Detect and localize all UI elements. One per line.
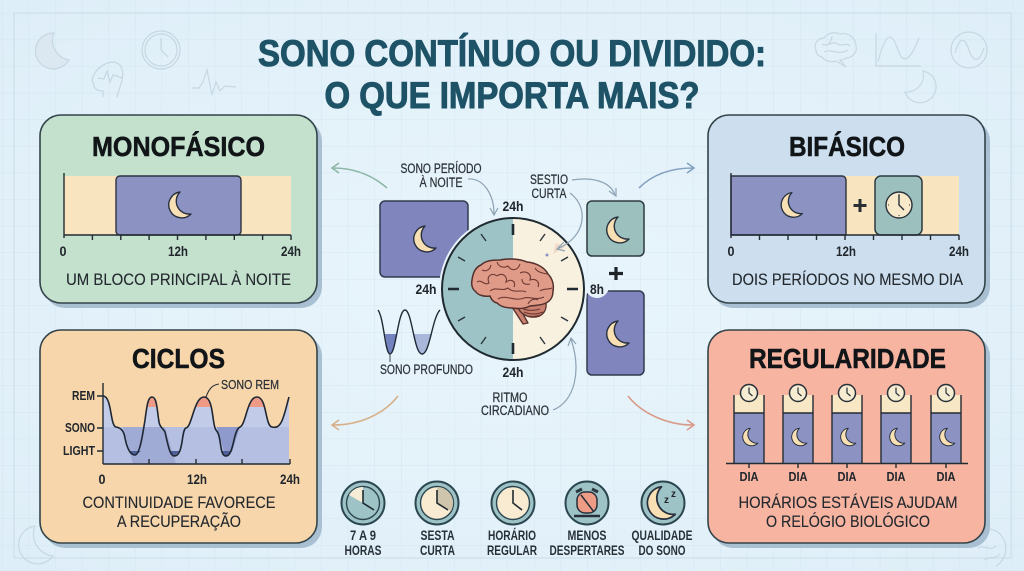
stat: horário regular — [487, 482, 537, 558]
weekly day columns: DIA — [936, 470, 956, 484]
arrow: to monofásico — [332, 163, 387, 188]
decorative icon: sine clock — [951, 32, 987, 68]
stat: 7 a 9 horas: 7 A 9 — [350, 528, 376, 543]
decorative icon: head with brain waves — [92, 62, 123, 97]
panel: monofásico — [40, 115, 322, 308]
sleep cycle chart: REM — [72, 389, 95, 403]
stat: 7 a 9 horas — [342, 482, 384, 558]
timeline chart: bifásico: 0 — [728, 243, 735, 259]
icon: moon — [607, 321, 629, 347]
sleep cycle chart: SONO — [65, 421, 95, 435]
callout: ritmo circadiano: CIRCADIANO — [481, 403, 549, 418]
deep sleep chart — [378, 310, 473, 377]
timeline chart: monofásico: 12h — [168, 243, 188, 259]
decorative icon: brain bottom right — [968, 529, 1006, 566]
timeline chart: monofásico: 0 — [60, 243, 67, 259]
stat: menos despertares: DESPERTARES — [550, 543, 624, 558]
callout: sono rem: SONO REM — [221, 378, 279, 392]
sleep cycle chart: 0 — [98, 471, 106, 487]
sleep block: nap — [587, 201, 644, 256]
stat: sesta curta — [416, 482, 458, 558]
stat: horário regular: REGULAR — [487, 543, 537, 558]
callout: sestio curta: CURTA — [532, 186, 566, 201]
callout: ritmo circadiano — [481, 338, 576, 418]
icon: plus — [854, 199, 866, 212]
icon: moon — [781, 193, 802, 217]
stat: qualidade do sono — [632, 482, 692, 558]
caption: regularidade: HORÁRIOS ESTÁVEIS AJUDAM — [738, 493, 958, 512]
title: O QUE IMPORTA MAIS? — [324, 75, 700, 116]
callout: sono período à noite — [400, 161, 498, 215]
caption: monofásico: UM BLOCO PRINCIPAL À NOITE — [66, 270, 291, 289]
weekly day columns: DIA — [838, 470, 856, 484]
heading: ciclos: CICLOS — [132, 343, 225, 374]
stat: menos despertares — [550, 482, 624, 558]
clock labels: 8h — [590, 281, 604, 297]
circadian clock — [416, 198, 604, 380]
caption: bifásico: DOIS PERÍODOS NO MESMO DIA — [732, 270, 964, 289]
caption: regularidade — [738, 493, 958, 531]
sleep cycle chart: 12h — [187, 471, 207, 487]
arrow: to regularidade — [628, 396, 694, 430]
stat: horário regular: HORÁRIO — [488, 528, 536, 543]
callout: sono período à noite: À NOITE — [420, 175, 462, 190]
caption: ciclos: A RECUPERAÇÃO — [117, 512, 241, 531]
callout: sestio curta: SESTIO — [530, 172, 568, 187]
callout: sestio curta — [530, 172, 616, 251]
decorative icon: line chart — [876, 33, 921, 66]
timeline chart: bifásico — [728, 173, 969, 259]
stat: qualidade do sono: DO SONO — [638, 543, 686, 558]
callout: sono rem — [206, 378, 279, 397]
weekly day columns: DIA — [788, 470, 808, 484]
timeline chart: monofásico — [60, 173, 301, 259]
stat: qualidade do sono: z — [664, 495, 669, 506]
arrow: to ciclos — [332, 396, 398, 430]
panel: bifásico — [708, 115, 990, 308]
stat: sesta curta: SESTA — [420, 528, 455, 543]
panel: regularidade — [708, 330, 990, 548]
caption: ciclos: CONTINUIDADE FAVORECE — [82, 493, 276, 512]
stat: sesta curta: CURTA — [420, 543, 455, 558]
caption: regularidade: O RELÓGIO BIOLÓGICO — [766, 512, 930, 531]
title: SONO CONTÍNUO OU DIVIDIDO: — [258, 33, 766, 74]
panel: ciclos — [40, 330, 322, 548]
icon: moon — [607, 217, 629, 243]
icon: brain — [472, 259, 553, 324]
decorative icon: moon bottom left — [19, 526, 53, 564]
stat: qualidade do sono: QUALIDADE — [632, 528, 692, 543]
heading: regularidade: REGULARIDADE — [749, 343, 946, 374]
title — [258, 33, 766, 116]
decorative icon: moon top left — [35, 33, 69, 69]
decorative icon: clock — [142, 31, 180, 69]
icon: plus between blocks — [609, 267, 623, 280]
callout: ritmo circadiano: RITMO — [492, 390, 528, 405]
icon: moon — [414, 226, 436, 252]
callout: sono período à noite: SONO PERÍODO — [400, 161, 482, 176]
weekly day columns: DIA — [886, 470, 906, 484]
decorative icon: moon top right — [905, 71, 936, 103]
arrow: to bifásico — [639, 163, 694, 188]
deep sleep chart: SONO PROFUNDO — [380, 362, 473, 377]
timeline chart: bifásico: 24h — [949, 243, 969, 259]
sleep block: night — [380, 201, 468, 277]
heading: bifásico: BIFÁSICO — [789, 131, 905, 162]
sleep cycle chart: LIGHT — [63, 444, 95, 458]
decorative icon: pulse wave — [192, 70, 236, 95]
icon: moon — [169, 192, 191, 218]
stat: qualidade do sono: z — [671, 489, 676, 500]
decorative icon: brain — [815, 33, 856, 67]
sleep cycle chart — [63, 378, 300, 487]
heading: monofásico: MONOFÁSICO — [92, 131, 265, 162]
caption: ciclos — [82, 493, 276, 531]
timeline chart: bifásico: 12h — [836, 243, 856, 259]
clock labels: 24h — [416, 281, 436, 297]
clock labels: 24h — [502, 198, 524, 214]
clock labels — [416, 198, 604, 380]
sleep cycle chart: 24h — [280, 471, 300, 487]
clock labels: 24h — [502, 364, 524, 380]
icon: clock — [886, 192, 912, 218]
weekly day columns: DIA — [740, 470, 758, 484]
stat: 7 a 9 horas: HORAS — [344, 543, 382, 558]
sleep block: main period — [585, 274, 644, 375]
weekly day columns — [726, 384, 968, 484]
timeline chart: monofásico: 24h — [281, 243, 301, 259]
stat: menos despertares: MENOS — [568, 528, 606, 543]
